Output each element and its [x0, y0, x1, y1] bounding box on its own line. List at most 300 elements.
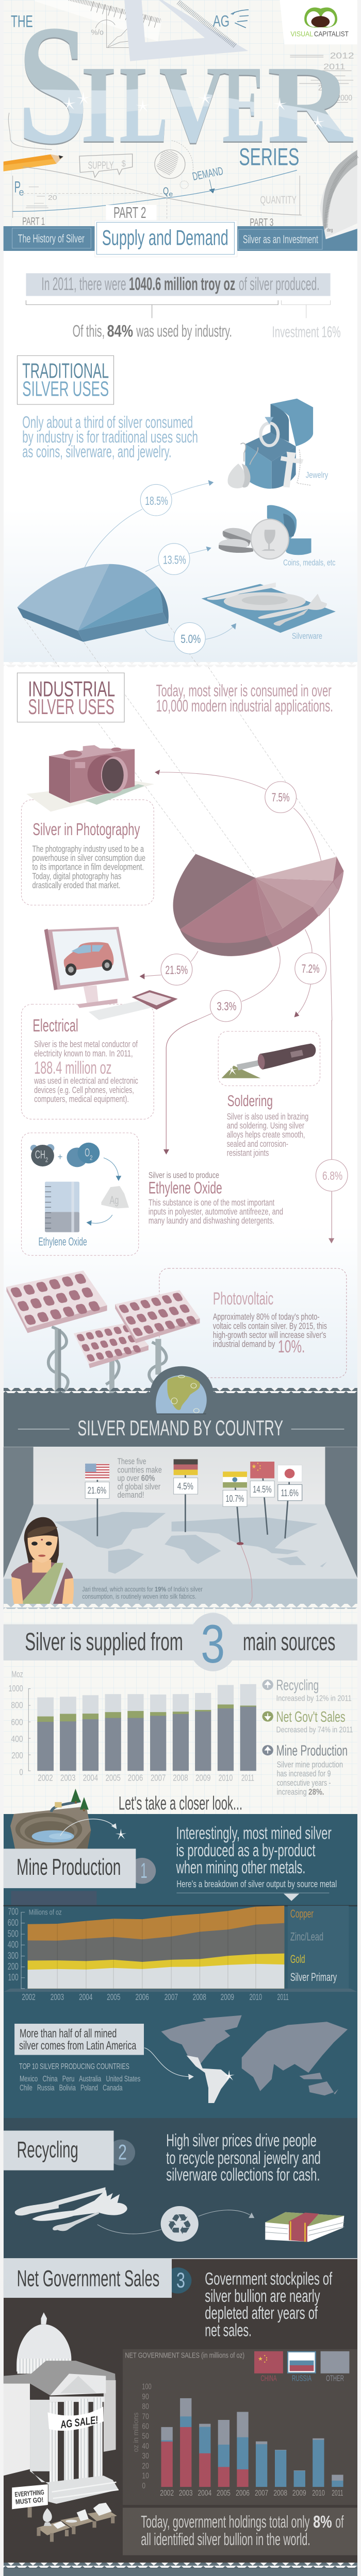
heading: recycling: 2	[118, 2141, 127, 2164]
chart: silver output by source metal: 100	[8, 1973, 19, 1983]
flag pin: usa	[85, 1464, 109, 1536]
card: ethylene oxide diagram: O	[85, 1146, 90, 1159]
chart: supply demand curves	[13, 167, 302, 219]
text: soldering: and soldering. Using silver	[227, 1121, 304, 1130]
chart: net government sales: 2010	[312, 2488, 325, 2498]
chart: net government sales: 100	[142, 2382, 152, 2392]
chart: silver output by source metal: 700	[8, 1907, 19, 1918]
card: ethylene oxide diagram	[22, 1133, 139, 1256]
sign: everything must go	[12, 2484, 48, 2517]
arrow: mine to silver	[60, 1819, 126, 1840]
text: electrical	[32, 1015, 138, 1104]
text: stockpiles: net sales.	[205, 2320, 252, 2340]
legend: mine production: 28%.	[308, 1787, 324, 1797]
panel: silver demand by country	[4, 1366, 357, 1614]
callout: government holdings: 8%	[313, 2513, 332, 2532]
panel: three main sources	[4, 1604, 357, 1814]
chart: supply stacked bars: 0	[19, 1767, 23, 1777]
title: Silver: V	[159, 43, 227, 165]
sketch: years: 2000	[337, 93, 352, 103]
callout: 21.5%	[161, 954, 192, 985]
card: photography: The photography industry used to be a	[32, 844, 144, 854]
title: Silver: E	[222, 43, 266, 165]
chart: silver output by source metal: 2002	[22, 1992, 36, 2002]
text: five countries: demand!	[118, 1489, 144, 1500]
arrow: to latin america	[144, 2048, 194, 2080]
label: part 2	[106, 204, 157, 222]
legend: mine production: consecutive years -	[277, 1777, 331, 1788]
text: ethylene oxide: Ethylene Oxide	[149, 1179, 222, 1197]
icon: jewelry box	[228, 399, 313, 489]
card: ethylene oxide diagram: 2	[45, 1156, 48, 1164]
sketch: years	[290, 50, 354, 103]
set square	[124, 0, 248, 61]
panel: mine production	[4, 1789, 357, 2119]
text: soldering: alloys helps create smooth,	[227, 1130, 305, 1140]
icon: silverware	[202, 583, 336, 633]
banner: ag sale	[47, 2406, 104, 2431]
illustration: government building	[4, 2312, 119, 2504]
heading: silver is supplied from 3 main sources	[4, 1613, 357, 1674]
chart: net government sales: 2009	[292, 2488, 306, 2498]
text: five countries	[118, 1456, 162, 1500]
text: intro	[156, 681, 333, 715]
text: ethylene oxide	[149, 1170, 283, 1226]
label: part 1: PART 1	[22, 215, 45, 227]
legend: recycling	[262, 1677, 352, 1703]
chart: net government sales: 0	[142, 2481, 145, 2490]
text: closer look: Let's take a closer look...	[119, 1793, 242, 1814]
flag pin: china: 14.5%	[253, 1485, 272, 1495]
sign: everything must go: EVERYTHING	[14, 2488, 44, 2498]
chart: supply demand curves: Q	[163, 185, 169, 197]
callout: 18.5%: 18.5%	[145, 495, 168, 507]
legend: mine production: has increased for 9	[277, 1769, 331, 1778]
label: silverware: Silverware	[292, 631, 322, 641]
text: top 10 countries: Chile Russia Bolivia Poland Canada	[20, 2083, 123, 2093]
flag pin: germany: 4.5%	[177, 1481, 193, 1492]
card: photography: Silver in Photography	[32, 820, 140, 839]
logo: Visual Capitalist: CAPITALIST	[314, 30, 349, 38]
title: Silver: R	[267, 43, 353, 165]
chart: net government sales: 2006	[236, 2488, 250, 2498]
banner: 1980 event	[4, 2568, 357, 2576]
sketch: mini chart	[91, 9, 129, 48]
callout: 7.2%	[295, 953, 326, 984]
card: photography: powerhouse in silver consumption due	[32, 853, 145, 863]
title: Silver: E	[222, 44, 266, 167]
sketch: years: 2011	[323, 62, 346, 72]
icon: open-pit mine	[10, 1789, 91, 1849]
heading: mine production	[4, 1849, 156, 1905]
chart: silver output by source metal: 200	[8, 1962, 19, 1972]
chart: supply stacked bars: 2004	[83, 1773, 98, 1783]
3d room	[4, 1447, 357, 1609]
chart: net government sales	[131, 2382, 343, 2498]
flag pin: china: ★	[251, 1463, 256, 1470]
heading: traditional silver uses: SILVER USES	[22, 377, 109, 400]
chart: net government sales: 90	[142, 2392, 149, 2401]
label: part 3: PART 3	[250, 216, 273, 228]
chart: net government sales: 2004	[198, 2488, 211, 2498]
chart: supply stacked bars: Moz	[11, 1669, 23, 1679]
chart: silver output by source metal: 2006	[135, 1992, 149, 2002]
stat: total production: In 2011, there were	[41, 274, 126, 294]
chart: supply stacked bars: 800	[11, 1700, 23, 1710]
icon: coins	[219, 505, 311, 559]
map: world floor	[54, 1512, 327, 1574]
text: electrical: Electrical	[32, 1015, 78, 1036]
chart: supply stacked bars: 1000	[9, 1684, 23, 1693]
text: ethylene oxide: inputs in polyester, automotive antifreeze, and	[149, 1207, 283, 1216]
card: ethylene oxide diagram: Ethylene Oxide	[39, 1235, 87, 1248]
flag pin: india	[223, 1471, 247, 1545]
heading: recycling: Recycling	[17, 2137, 78, 2162]
sketch: supply bubble	[79, 154, 133, 177]
text: recycling	[166, 2130, 321, 2185]
illustration: tables of silver	[37, 2503, 117, 2542]
chart: net government sales: 30	[142, 2451, 149, 2461]
map: world	[161, 2015, 348, 2103]
heading: traditional silver uses: TRADITIONAL	[22, 359, 109, 382]
callout: jari thread: Jari thread, which accounts for	[82, 1585, 153, 1593]
figure: woman in sari	[11, 1517, 74, 1614]
chart: net government sales: 2003	[179, 2488, 193, 2498]
title: Silver: L	[119, 43, 168, 165]
text: stockpiles	[205, 2268, 332, 2340]
panel: traditional silver uses	[4, 221, 357, 680]
text: ethylene oxide: many laundry and dishwashing detergents.	[149, 1216, 274, 1226]
text: intro	[22, 413, 198, 461]
callout: 7.2%: 7.2%	[302, 962, 320, 975]
chart: supply demand curves: P	[14, 178, 21, 196]
text: soldering: Silver is also used in brazing	[227, 1111, 308, 1122]
card: soldering image	[218, 1031, 320, 1086]
callout: 21.5%: 21.5%	[166, 963, 188, 977]
flag pin: germany	[174, 1459, 198, 1532]
callout: latin america: silver comes from Latin America	[19, 2039, 137, 2053]
title: Silver: L	[119, 44, 168, 167]
chart: net government sales: 2008	[273, 2488, 287, 2498]
heading: net government sales	[4, 2259, 357, 2298]
bracket: industry share	[26, 300, 278, 318]
text: intro: by industry is for traditional uses such	[22, 428, 198, 447]
text: soldering: resistant joints	[227, 1148, 269, 1158]
text: soldering	[227, 1092, 308, 1158]
heading: industrial silver uses	[17, 673, 124, 722]
callout: latin america	[14, 2024, 144, 2055]
icon: solar panels	[6, 1270, 200, 1393]
sketch: years: 2005	[318, 83, 335, 92]
flag pin: usa: 21.6%	[88, 1485, 106, 1496]
bracket: investment share	[282, 300, 331, 318]
arrow: to ethylene oxide	[163, 1020, 197, 1155]
title: Silver	[17, 0, 353, 181]
legend: net government sales	[262, 1709, 353, 1734]
text: electrical: electricity known to man. In 2011,	[34, 1048, 133, 1059]
callout: 13.5%	[158, 544, 190, 574]
text: intro: as coins, silverware, and jewelry.	[22, 442, 172, 461]
chart: silver output by source metal: 2011	[277, 1992, 289, 2002]
chart: silver output by source metal: 2009	[221, 1992, 234, 2002]
title: Silver: R	[267, 44, 353, 167]
callout: 5.0%: 5.0%	[180, 633, 201, 646]
banner: ag sale: AG SALE!	[59, 2414, 99, 2431]
callout: 3.3%: 3.3%	[217, 1000, 236, 1013]
heading: silver is supplied from 3 main sources: 3	[201, 1614, 225, 1674]
title: Silver: V	[159, 44, 227, 167]
flag pin: china	[250, 1462, 274, 1535]
label: part 2: PART 2	[113, 204, 146, 222]
nav band: The History of Silver	[18, 232, 85, 245]
card: photography: Today, digital photography has	[32, 871, 121, 881]
icon: recycle symbol	[161, 2206, 199, 2242]
chart: silver output by source metal: 600	[8, 1918, 19, 1928]
panel: net government sales	[4, 2259, 357, 2563]
sketch: AG: AG	[213, 12, 229, 30]
heading: industrial silver uses: INDUSTRIAL	[28, 678, 115, 701]
chart: silver output by source metal: 2005	[107, 1992, 120, 2002]
chart: supply stacked bars: 2010	[219, 1773, 233, 1783]
text: by-product	[176, 1823, 337, 1901]
chart: silver output by source metal: Gold	[290, 1953, 305, 1965]
sign: everything must go: MUST GO!	[15, 2496, 44, 2506]
protractor: deg	[327, 228, 333, 233]
text: five countries: These five	[118, 1456, 146, 1466]
callout: 18.5%	[140, 484, 172, 516]
nav band	[4, 226, 357, 251]
chart: net government sales: 60	[142, 2422, 149, 2431]
icon: camera	[26, 745, 154, 811]
chart background and legend	[123, 2349, 357, 2505]
callout: jari thread	[64, 1545, 252, 1605]
chart background and legend: NET GOVERNMENT SALES (in millions of oz)	[125, 2351, 244, 2360]
title: Silver: I	[80, 43, 117, 165]
chart: silver output by source metal: Copper	[290, 1908, 314, 1920]
label: coins: Coins, medals, etc	[283, 557, 336, 568]
connectors: industrial	[140, 770, 332, 1021]
chart: silver output by source metal: 2008	[193, 1992, 206, 2002]
card: ethylene oxide diagram: +	[58, 1152, 62, 1162]
callout: 13.5%: 13.5%	[163, 553, 186, 566]
legend: recycling: Recycling	[276, 1677, 319, 1693]
card: photography	[22, 800, 154, 905]
callout: jari thread: of India's silver	[168, 1585, 203, 1593]
heading: industrial silver uses: SILVER USES	[28, 696, 114, 719]
icon: globe	[150, 1366, 214, 1414]
arrow: recycling to cash	[199, 2210, 254, 2218]
callout: government holdings	[123, 2507, 357, 2555]
legend: mine production	[262, 1742, 348, 1797]
logo: Visual Capitalist: VISUAL	[290, 30, 313, 38]
arrow: to photovoltaic	[329, 1020, 334, 1244]
text: top 10 countries	[19, 2062, 140, 2093]
chart background and legend: CHINA	[260, 2374, 277, 2383]
callout: jari thread: 19%	[155, 1585, 166, 1593]
chart: net government sales: 2005	[217, 2488, 231, 2498]
callout: latin america: More than half of all mined	[20, 2027, 117, 2040]
dashed connector lines	[24, 619, 208, 680]
card: ethylene oxide diagram: Ag	[109, 1194, 119, 1207]
text: electrical: was used in electrical and electronic	[34, 1076, 138, 1086]
chart: silver output by source metal: Millions of oz	[29, 1908, 62, 1917]
card: photography: to its importance in film development.	[32, 862, 144, 872]
sketch: arrow doodle	[8, 113, 52, 149]
chart: supply demand curves: 20	[48, 194, 57, 201]
chart: supply stacked bars: 2002	[38, 1773, 53, 1783]
icon: cutlery	[15, 2187, 127, 2231]
chart: silver output by source metal: 500	[8, 1929, 19, 1939]
text: top 10 countries: TOP 10 SILVER PRODUCING COUNTRIES	[19, 2062, 129, 2071]
panel: industrial silver uses	[4, 666, 357, 1393]
heading: The: THE	[11, 12, 33, 31]
protractor	[320, 149, 357, 238]
chart: supply stacked bars: 2003	[60, 1773, 75, 1783]
chart: supply stacked bars: 2006	[128, 1773, 143, 1783]
heading: net government sales: 3	[176, 2268, 185, 2293]
chart: supply stacked bars: 2011	[241, 1773, 254, 1783]
chart: net government sales: 2007	[255, 2488, 268, 2498]
chart: supply stacked bars: 600	[11, 1717, 23, 1727]
callout: government holdings: of	[335, 2513, 344, 2532]
chart: supply stacked bars: 2009	[195, 1773, 210, 1783]
logo: Visual Capitalist	[280, 0, 357, 44]
stat: industry 84%: was used by industry.	[136, 322, 232, 341]
heading: silver is supplied from 3 main sources: Silver is supplied from	[25, 1628, 183, 1656]
pie: industrial	[173, 854, 343, 956]
chart: net government sales: 50	[142, 2432, 149, 2441]
sketch: supply bubble: SUPPLY	[88, 160, 114, 171]
callout: 6.8%: 6.8%	[322, 1169, 342, 1182]
panel: silver thursday	[4, 2563, 357, 2576]
text: five countries: up over	[118, 1473, 139, 1483]
icon: computer	[22, 927, 178, 1119]
card: ethylene oxide diagram: CH	[35, 1148, 45, 1161]
sketch: arrow to curve	[209, 180, 215, 193]
flag pin: japan	[277, 1465, 302, 1538]
chart: silver output by source metal: Zinc/Lead	[290, 1930, 323, 1943]
stat: industry 84%: Of this,	[73, 322, 105, 341]
chart background and legend: RUSSIA	[292, 2374, 311, 2383]
stat: industry 84%: 84%	[107, 322, 133, 341]
card: photovoltaic: industrial demand by	[213, 1339, 275, 1349]
text: ethylene oxide: This substance is one of the most important	[149, 1197, 274, 1208]
chart: net government sales: 2002	[160, 2488, 174, 2498]
chart: silver output by source metal	[4, 1906, 357, 2002]
icon: recycle symbol: ♻	[166, 2209, 193, 2241]
stat: total production	[26, 273, 331, 296]
sketch: demand label: DEMAND	[191, 164, 224, 183]
text: soldering: Soldering	[227, 1092, 273, 1110]
callout: jari thread: consumption, is routinely woven into silk fabrics.	[82, 1592, 196, 1600]
chart: net government sales: 10	[142, 2471, 149, 2481]
text: intro: Only about a third of silver consumed	[22, 413, 193, 432]
chart: net government sales: oz in millions	[131, 2412, 140, 2452]
chart: silver output by source metal: 2004	[79, 1992, 92, 2002]
arrow: cutlery to recycling	[97, 2225, 161, 2234]
chart: silver output by source metal: 2010	[249, 1992, 262, 2002]
chart: supply stacked bars: 2007	[151, 1773, 166, 1783]
chart background and legend: ★	[258, 2356, 263, 2362]
tab: supply and demand: Supply and Demand	[102, 226, 228, 250]
callout: 6.8%	[316, 1160, 348, 1191]
chart: silver output by source metal: 400	[8, 1940, 19, 1951]
card: ethylene oxide diagram: 2	[90, 1154, 92, 1161]
stat: industry 84%	[73, 322, 232, 341]
chart: supply stacked bars: 200	[11, 1750, 23, 1760]
sketch: mini chart: %/o	[91, 28, 104, 37]
callout: 7.5%: 7.5%	[272, 791, 290, 804]
chart: supply demand curves: QUANTITY	[260, 193, 297, 206]
text: electrical: devices (e.g. Cell phones, vehicles,	[34, 1085, 134, 1095]
legend: mine production: increasing	[277, 1787, 307, 1797]
heading: traditional silver uses	[17, 355, 114, 404]
dashed connector lines	[67, 666, 336, 877]
chart: net government sales: 80	[142, 2402, 149, 2411]
text: top 10 countries: Mexico China Peru Australia United States	[20, 2074, 140, 2083]
sketch: years: 2012	[330, 50, 354, 61]
chart: supply stacked bars: 2008	[173, 1773, 188, 1783]
chart: silver output by source metal: 2003	[51, 1992, 64, 2002]
callout: 5.0%	[174, 622, 205, 654]
chart: net government sales: 2011	[332, 2488, 343, 2498]
heading: mine production: Mine Production	[17, 1854, 121, 1880]
text: five countries: countries make	[118, 1465, 162, 1475]
chart: net government sales: 70	[142, 2412, 149, 2421]
chart: supply stacked bars: 2005	[105, 1773, 121, 1783]
card: photography: drastically eroded that market.	[32, 880, 120, 890]
text: electrical: 188.4 million oz	[34, 1058, 112, 1078]
tab: supply and demand	[95, 221, 237, 257]
callout: 3.3%	[210, 990, 241, 1022]
title: Silver: I	[80, 44, 117, 167]
card: photovoltaic	[159, 1268, 347, 1378]
pencil	[4, 155, 63, 172]
heading: net government sales: Net Government Sales	[17, 2266, 159, 2291]
ruler	[35, 0, 162, 41]
stat: total production: 1040.6 million troy oz	[129, 274, 235, 294]
chart: net government sales: 40	[142, 2442, 149, 2451]
card: photovoltaic: Photovoltaic	[213, 1289, 273, 1309]
text: soldering: sealed and corrosion-	[227, 1139, 288, 1149]
text: electrical: computers, medical equipment).	[34, 1094, 129, 1104]
chart: silver output by source metal: 2007	[165, 1992, 178, 2002]
callout: 7.5%	[265, 782, 297, 813]
chart: net government sales: 20	[142, 2462, 149, 2470]
connectors: traditional	[85, 480, 236, 641]
text: electrical: Silver is the best metal conductor of	[34, 1039, 138, 1049]
chart: supply demand curves: e	[169, 190, 173, 198]
flag pin: japan: 11.6%	[281, 1488, 299, 1499]
flag pin: india: 10.7%	[225, 1494, 244, 1504]
pie: traditional	[17, 564, 169, 642]
heading: Series: SERIES	[239, 144, 299, 171]
chart: supply stacked bars: 400	[11, 1734, 23, 1744]
chart: silver output by source metal: 300	[8, 1951, 19, 1961]
sketch: globe	[155, 141, 193, 189]
chart: supply stacked bars	[9, 1669, 256, 1783]
heading: recycling	[4, 2131, 135, 2171]
sketch: AG	[213, 10, 249, 30]
sketch: supply bubble: $	[122, 159, 126, 168]
card: photovoltaic: 10%.	[278, 1336, 305, 1357]
chart background and legend: OTHER	[326, 2374, 344, 2383]
chart: supply demand curves: e	[19, 187, 24, 198]
text: ethylene oxide: Silver is used to produce	[149, 1170, 219, 1180]
text: five countries: 60%	[141, 1473, 155, 1483]
label: jewelry: Jewelry	[306, 470, 328, 480]
heading: mine production: 1	[140, 1859, 147, 1883]
